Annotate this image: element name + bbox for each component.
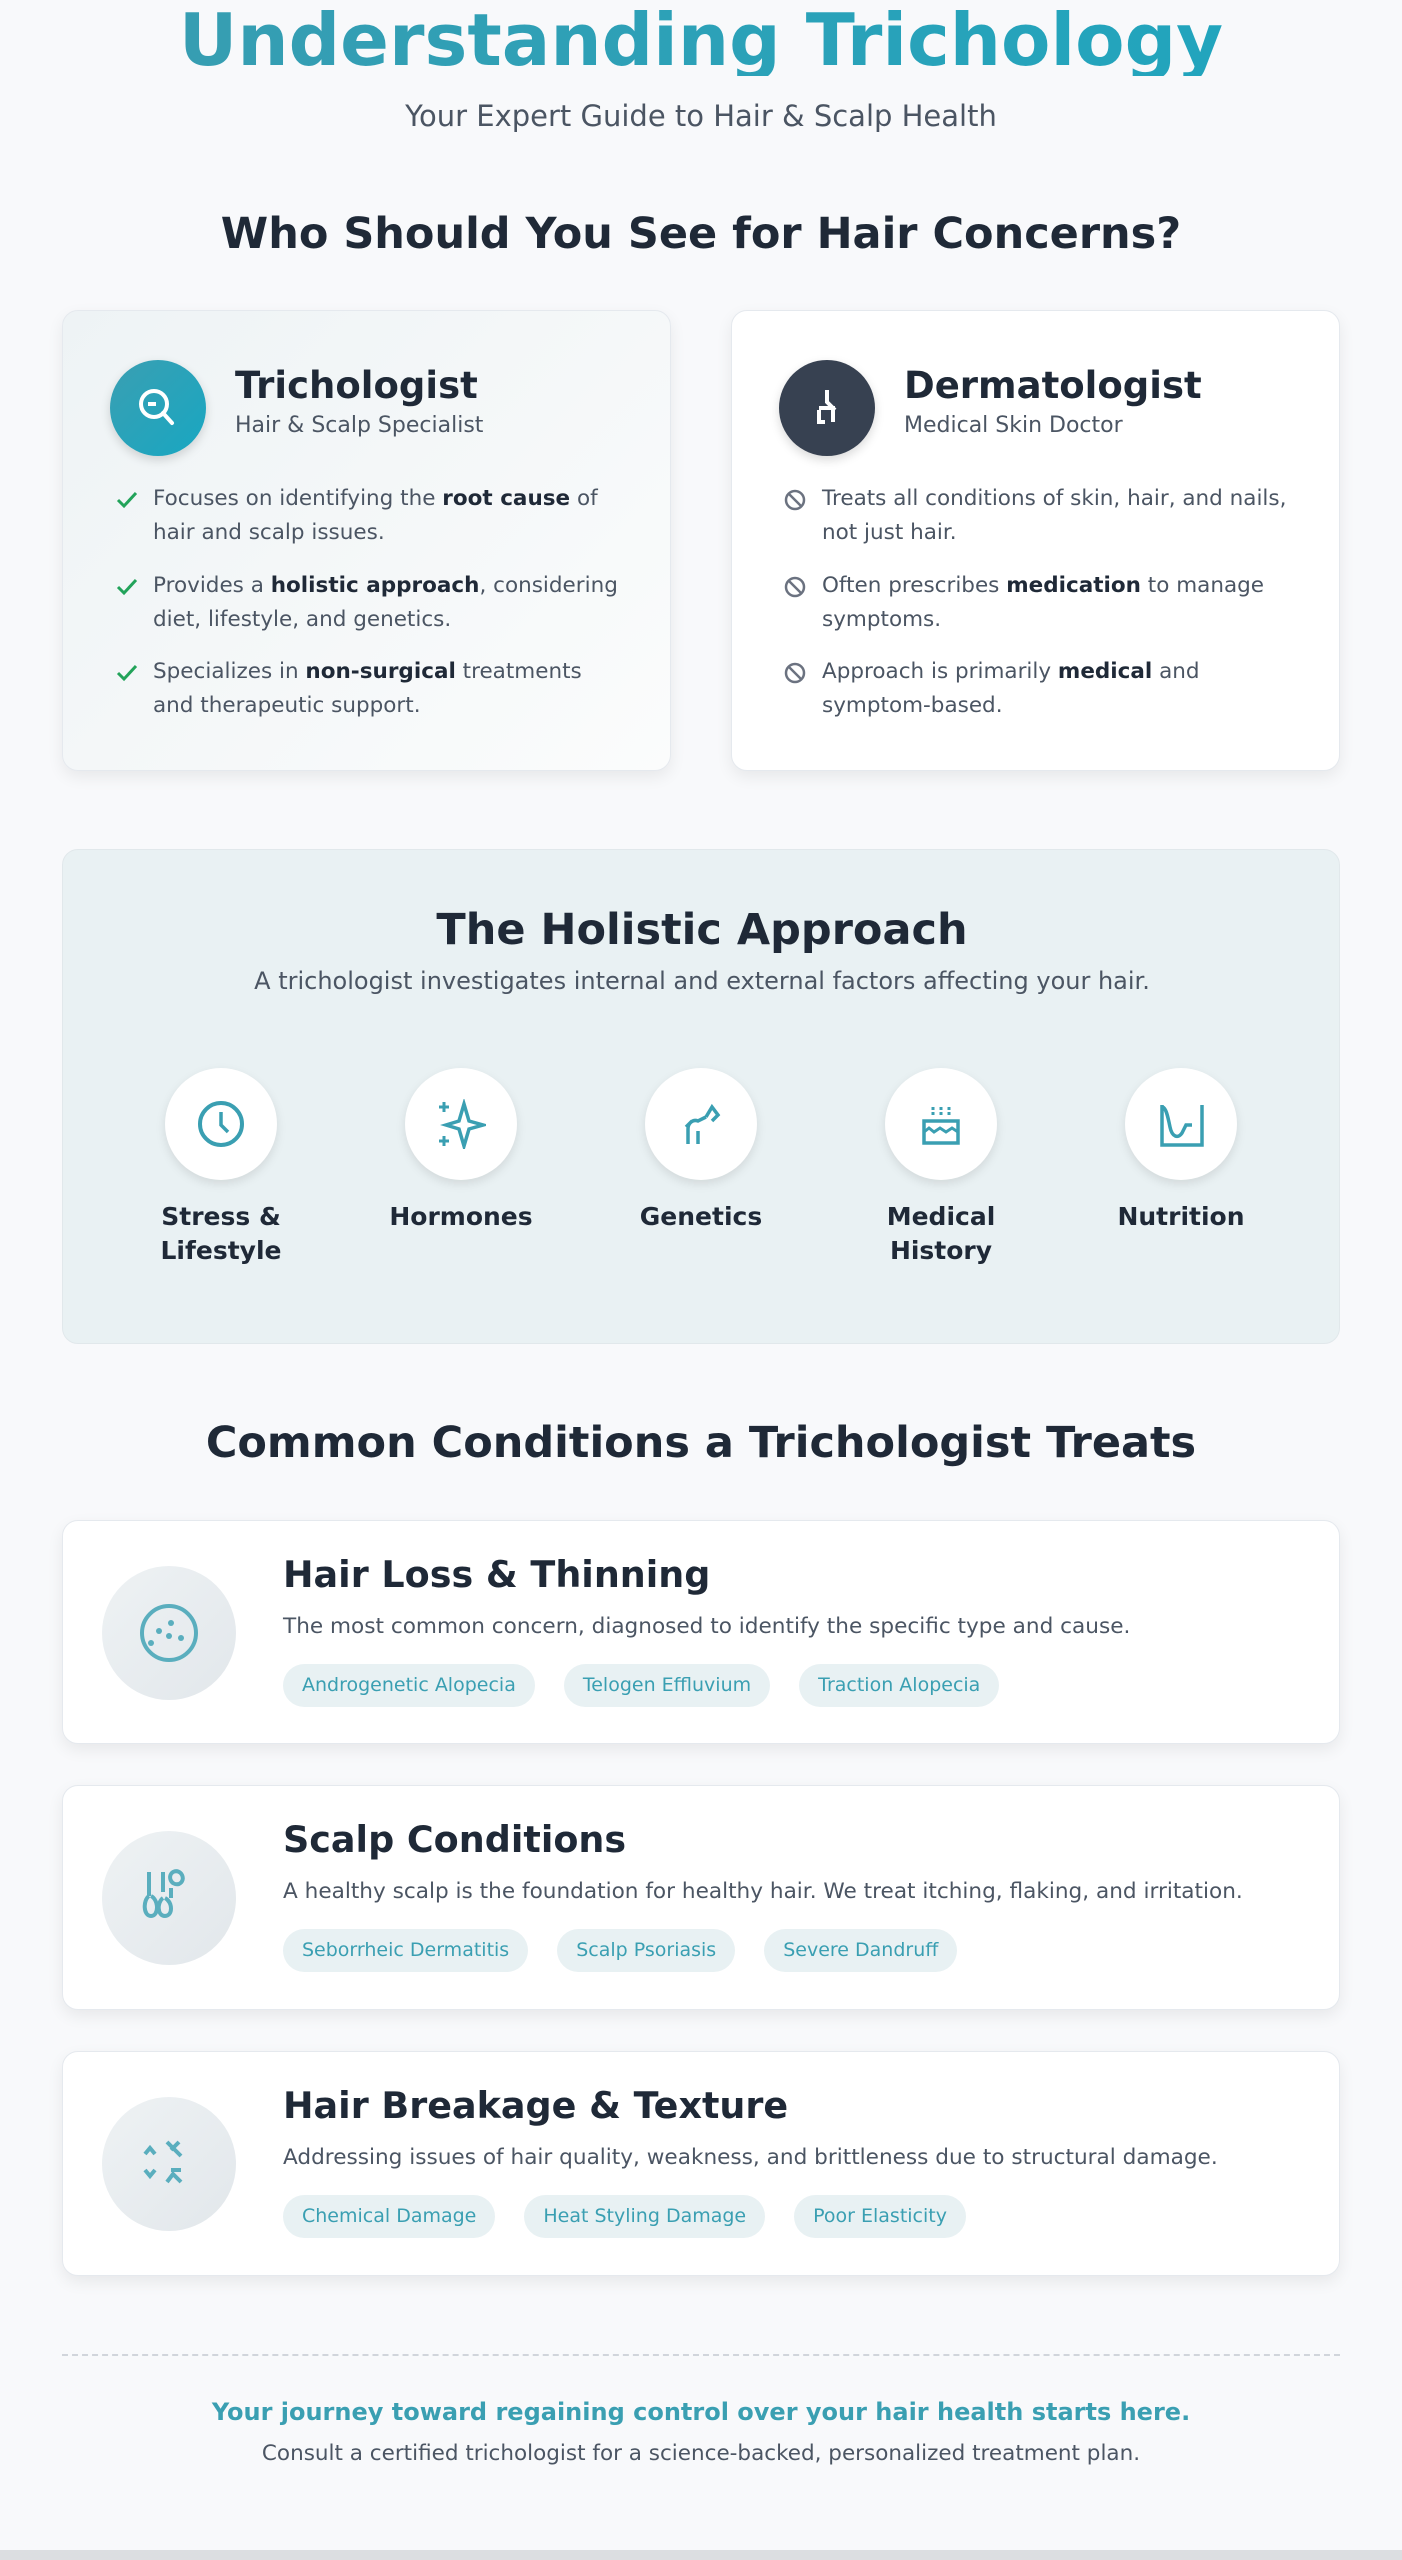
tags bbox=[283, 2195, 966, 2238]
description: Addressing issues of hair quality, weakness, and brittleness due to structural damage. bbox=[283, 2145, 1218, 2170]
icon: medical history cake bbox=[885, 1068, 997, 1180]
title: Understanding Trichology bbox=[179, 0, 1223, 82]
label: nutrition: Nutrition bbox=[1117, 1202, 1245, 1231]
icon: magnifier bbox=[110, 360, 206, 456]
subheading: Medical Skin Doctor bbox=[904, 413, 1123, 438]
panel: trichologist bbox=[62, 310, 671, 771]
panel: hair breakage bbox=[62, 2051, 1340, 2276]
heading: The Holistic Approach bbox=[436, 905, 968, 955]
tags: Traction Alopecia bbox=[818, 1674, 980, 1696]
panel: hair loss bbox=[62, 1520, 1340, 1744]
bullet list: Focuses on identifying the root cause of hair and scalp issues. bbox=[153, 486, 598, 545]
tags bbox=[283, 1664, 999, 1707]
panel: scalp conditions bbox=[62, 1785, 1340, 2010]
tags: Heat Styling Damage bbox=[543, 2205, 746, 2227]
bullet list: Treats all conditions of skin, hair, and nails, not just hair. bbox=[822, 486, 1286, 545]
label: medical history: Medical bbox=[887, 1202, 995, 1231]
heading: Scalp Conditions bbox=[283, 1818, 626, 1861]
label: medical history: History bbox=[890, 1236, 992, 1265]
icon: nutrition bbox=[1125, 1068, 1237, 1180]
heading: Hair Loss & Thinning bbox=[283, 1553, 710, 1596]
tags: Chemical Damage bbox=[302, 2205, 476, 2227]
heading: dermatologist: Dermatologist bbox=[904, 364, 1202, 407]
panel: holistic approach bbox=[62, 849, 1340, 1344]
label: hormones: Hormones bbox=[389, 1202, 533, 1231]
tags: Androgenetic Alopecia bbox=[302, 1674, 516, 1696]
icon: scalp bubbles bbox=[102, 1831, 236, 1965]
icon: stress clock bbox=[165, 1068, 277, 1180]
subtitle: Your Expert Guide to Hair & Scalp Health bbox=[405, 99, 997, 133]
heading: who should you see: Who Should You See for Hair Concerns? bbox=[221, 209, 1181, 259]
icon: scalp bbox=[102, 1566, 236, 1700]
label: stress: Stress & bbox=[161, 1202, 281, 1231]
heading: Hair Breakage & Texture bbox=[283, 2084, 788, 2127]
bullet list bbox=[784, 486, 1286, 718]
icon: doctor bbox=[779, 360, 875, 456]
footer callout: Your journey toward regaining control over your hair health starts here. bbox=[212, 2398, 1190, 2426]
tags: Telogen Effluvium bbox=[583, 1674, 751, 1696]
label: medical history bbox=[887, 1202, 995, 1265]
tags: Poor Elasticity bbox=[813, 2205, 947, 2227]
description: The most common concern, diagnosed to identify the specific type and cause. bbox=[283, 1614, 1130, 1639]
icon: genetics bbox=[645, 1068, 757, 1180]
heading: common conditions: Common Conditions a Trichologist Treats bbox=[206, 1418, 1196, 1468]
subheading: Hair & Scalp Specialist bbox=[235, 413, 483, 438]
description: A healthy scalp is the foundation for healthy hair. We treat itching, flaking, and irritation. bbox=[283, 1879, 1243, 1904]
bullet list: Often prescribes medication to manage symptoms. bbox=[822, 573, 1264, 632]
tags: Scalp Psoriasis bbox=[576, 1939, 716, 1961]
label: genetics: Genetics bbox=[640, 1202, 762, 1231]
tags: Seborrheic Dermatitis bbox=[302, 1939, 509, 1961]
footer note: Consult a certified trichologist for a science-backed, personalized treatment plan. bbox=[262, 2441, 1140, 2466]
tags: Severe Dandruff bbox=[783, 1939, 938, 1961]
icon: hormones sparkle bbox=[405, 1068, 517, 1180]
label: stress bbox=[160, 1202, 281, 1265]
bullet list: Approach is primarily medical and symptom-based. bbox=[822, 659, 1200, 718]
bullet list bbox=[117, 486, 618, 718]
panel: dermatologist bbox=[731, 310, 1340, 771]
heading: trichologist: Trichologist bbox=[235, 364, 478, 407]
bullet list: Provides a holistic approach, considering diet, lifestyle, and genetics. bbox=[153, 573, 618, 632]
label: stress: Lifestyle bbox=[160, 1236, 281, 1265]
description: A trichologist investigates internal and external factors affecting your hair. bbox=[254, 967, 1150, 995]
icon: breakage arrows bbox=[102, 2097, 236, 2231]
tags bbox=[283, 1929, 957, 1972]
bullet list: Specializes in non-surgical treatments and therapeutic support. bbox=[153, 659, 582, 718]
